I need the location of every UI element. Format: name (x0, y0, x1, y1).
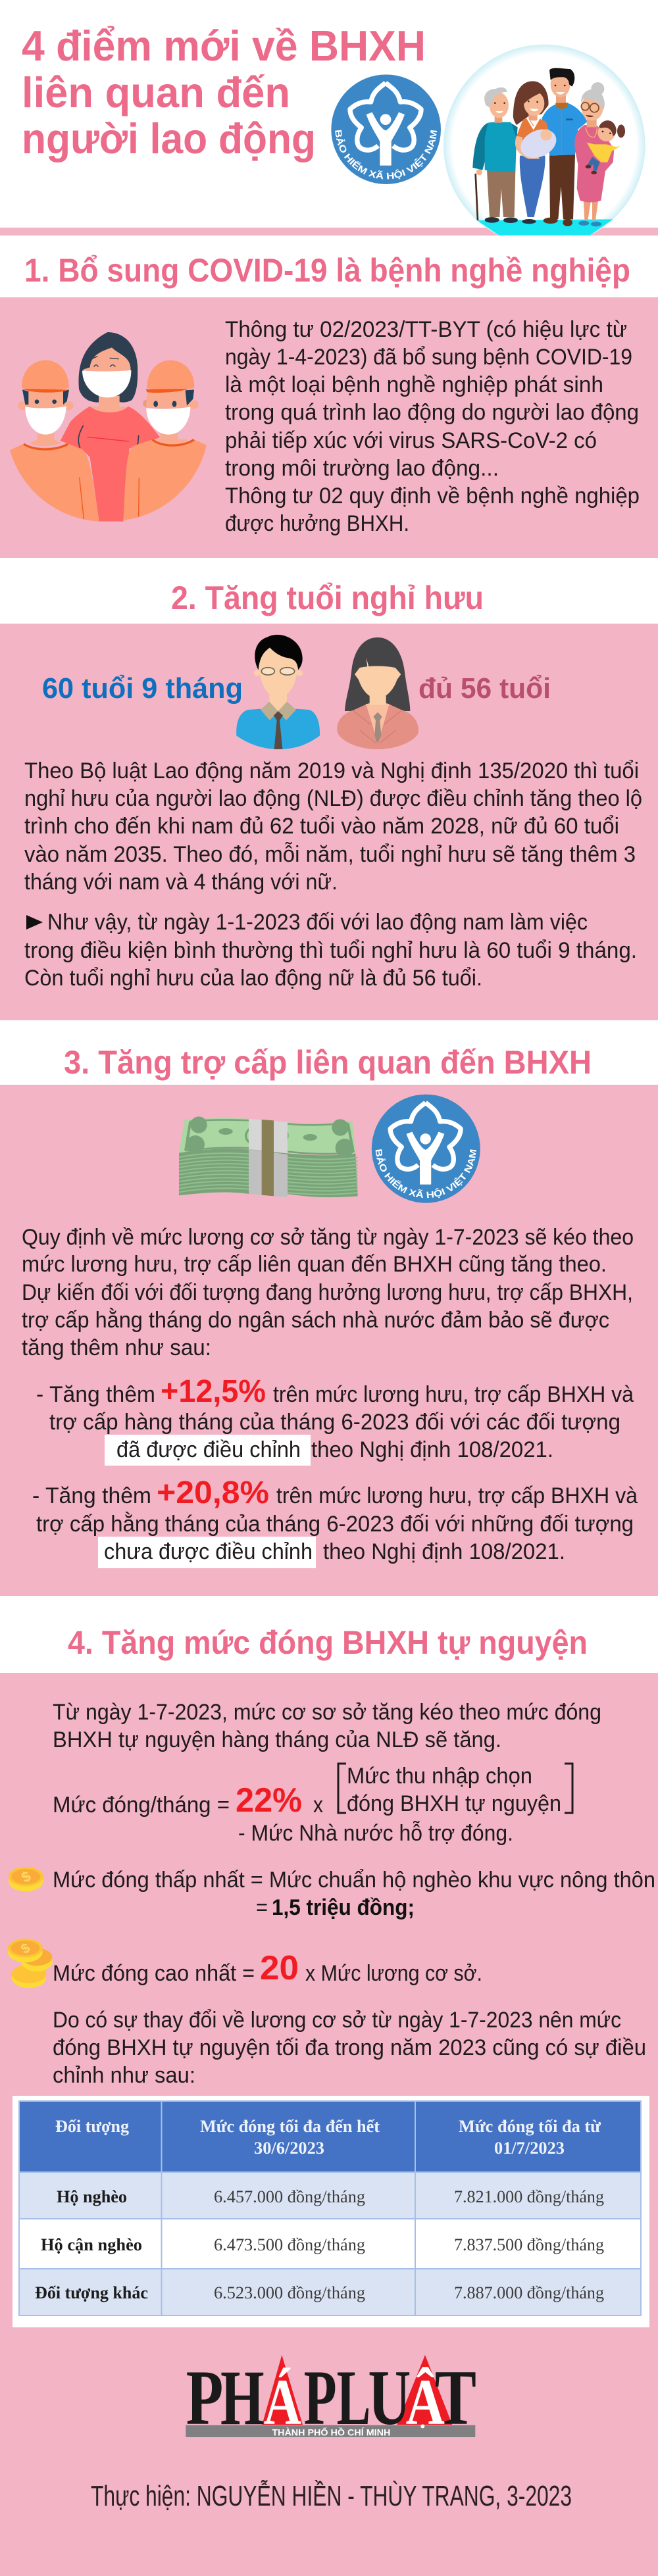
logo: Pháp Luật: L (337, 2354, 370, 2441)
text block: section 1: Thông tư 02/2023/TT-BYT (có hiệu lực từ (225, 317, 627, 342)
callout: increase of 12.5%: trợ cấp hàng tháng của tháng 6-2023 đối với các đối tượng (49, 1410, 620, 1435)
grandfather (472, 87, 518, 223)
callout: increase of 20.8%: trợ cấp hằng tháng của tháng 6-2023 đối với những đối tượng (36, 1512, 634, 1537)
icon: BHXH logo (331, 74, 441, 184)
icon: pile of coins (8, 1939, 53, 1988)
text block: section 1: là một loại bệnh nghề nghiệp phát sinh (225, 372, 603, 397)
formula: monthly contribution: Mức đóng/tháng = (53, 1793, 230, 1818)
heading: section 4: 4. Tăng mức đóng BHXH tự nguyện (68, 1624, 588, 1661)
logo: Pháp Luật: H (220, 2354, 265, 2441)
icon: woman avatar (337, 637, 418, 749)
text block: section 1 (225, 317, 640, 536)
callout: increase of 20.8%: - Tăng thêm (32, 1483, 151, 1508)
table row: Hộ cận nghèo: Hộ cận nghèo (41, 2235, 142, 2254)
text block: section 3 intro: trợ cấp hằng tháng do ngân sách nhà nước đảm bảo sẽ được (22, 1308, 609, 1333)
text block: section 2 explanation (24, 758, 642, 895)
formula: monthly contribution: đóng BHXH tự nguyện (347, 1791, 561, 1816)
logo: Pháp Luật: P (304, 2354, 337, 2441)
grandmother with child (574, 82, 625, 226)
heading: section 3: 3. Tăng trợ cấp liên quan đến BHXH (64, 1044, 592, 1081)
table row: Hộ cận nghèo: 7.837.500 đồng/tháng (454, 2235, 604, 2254)
icon: BHXH logo: BẢO HIỂM XÃ HỘI VIỆT NAM (335, 130, 437, 179)
callout: increase of 20.8% (32, 1475, 638, 1568)
logo: Pháp Luật: Á (264, 2365, 301, 2439)
table row: Hộ nghèo: 7.821.000 đồng/tháng (454, 2187, 604, 2206)
table row: Đối tượng khác: 7.887.000 đồng/tháng (454, 2283, 604, 2302)
formula: monthly contribution: Mức thu nhập chọn (347, 1764, 532, 1789)
table row: Hộ cận nghèo (41, 2235, 604, 2254)
text block: section 2 explanation: trình cho đến khi nam đủ 62 tuổi vào năm 2028, nữ đủ 60 tuổi (24, 814, 619, 839)
text block: section 2 conclusion: trong điều kiện bình thường thì tuổi nghỉ hưu là 60 tuổi 9 tháng. (24, 938, 637, 963)
callout: increase of 12.5%: trên mức lương hưu, trợ cấp BHXH và (273, 1382, 634, 1407)
mother with baby (513, 81, 561, 224)
callout: increase of 20.8%: trên mức lương hưu, trợ cấp BHXH và (276, 1483, 638, 1508)
table row: Hộ nghèo: Hộ nghèo (57, 2187, 127, 2206)
callout: increase of 20.8%: theo Nghị định 108/2021. (323, 1539, 565, 1564)
callout: increase of 12.5%: - Tăng thêm (36, 1382, 155, 1407)
text block: table intro: Do có sự thay đổi về lương cơ sở từ ngày 1-7-2023 nên mức (53, 2008, 621, 2033)
text block: section 2 conclusion: Còn tuổi nghỉ hưu của lao động nữ là đủ 56 tuổi. (24, 966, 482, 991)
label: female retirement age: đủ 56 tuổi (418, 672, 551, 705)
text block: section 3 intro: Quy định về mức lương cơ sở tăng từ ngày 1-7-2023 sẽ kéo theo (22, 1225, 634, 1250)
table header: Đối tượng (55, 2117, 129, 2136)
title: người lao động (22, 114, 316, 162)
logo: Pháp Luật: P (186, 2354, 223, 2441)
text block: section 1: được hưởng BHXH. (225, 511, 409, 536)
formula: monthly contribution: - Mức Nhà nước hỗ trợ đóng. (238, 1821, 513, 1846)
text block: table intro (53, 2008, 646, 2088)
icon: BHXH logo: BẢO HIỂM XÃ HỘI VIỆT NAM (375, 1149, 476, 1199)
logo: Pháp Luật: T (435, 2354, 476, 2441)
text block: table intro: chỉnh như sau: (53, 2063, 195, 2088)
callout: increase of 12.5% (36, 1374, 634, 1466)
title: liên quan đến (22, 68, 290, 116)
table: maximum voluntary contribution (13, 2096, 649, 2327)
icon: family in a bubble (443, 45, 645, 246)
text block: maximum contribution: 20 (260, 1949, 299, 1987)
text block: section 4 intro (53, 1700, 601, 1752)
table header: 01/7/2023 (494, 2139, 565, 2158)
text block: minimum contribution: = (256, 1895, 268, 1920)
text block: maximum contribution: Mức đóng cao nhất = (53, 1961, 255, 1986)
table row: Đối tượng khác: Đối tượng khác (35, 2283, 148, 2302)
logo: Pháp Luật: Â (406, 2365, 445, 2439)
text block: section 1: trong quá trình lao động do người lao động (225, 400, 639, 425)
table row: Hộ nghèo: 6.457.000 đồng/tháng (214, 2187, 365, 2206)
icon: three workers wearing masks (10, 332, 207, 522)
icon: single coin (9, 1867, 43, 1891)
callout: increase of 20.8%: chưa được điều chỉnh (104, 1539, 313, 1564)
father (542, 68, 588, 226)
table row: Hộ nghèo (57, 2187, 604, 2206)
text block: section 4 intro: Từ ngày 1-7-2023, mức cơ sơ sở tăng kéo theo mức đóng (53, 1700, 601, 1725)
text block: section 1: trong môi trường lao động... (225, 456, 499, 481)
heading: section 2: 2. Tăng tuổi nghỉ hưu (171, 580, 484, 616)
arrow (26, 915, 43, 929)
woman in center (61, 332, 160, 522)
text block: section 3 intro: mức lương hưu, trợ cấp liên quan đến BHXH cũng tăng theo. (22, 1252, 607, 1277)
icon: stack of money (179, 1116, 358, 1197)
formula: monthly contribution: x (313, 1793, 323, 1818)
table row: Hộ cận nghèo: 6.473.500 đồng/tháng (214, 2235, 365, 2254)
text block: minimum contribution: 1,5 triệu đồng; (272, 1895, 415, 1920)
icon: BHXH logo (371, 1095, 480, 1203)
title: 4 điểm mới về BHXH (22, 22, 426, 70)
table header: Mức đóng tối đa đến hết (200, 2117, 380, 2136)
icon: pile of coins: $ (18, 1940, 33, 1957)
text block: maximum contribution: x Mức lương cơ sở. (305, 1961, 482, 1986)
right worker (123, 360, 207, 520)
icon: single coin: $ (18, 1868, 34, 1886)
text block: section 2 conclusion (24, 910, 637, 991)
label: male retirement age: 60 tuổi 9 tháng (42, 672, 243, 705)
text block: section 3 intro: tăng thêm như sau: (22, 1335, 211, 1360)
table header: 30/6/2023 (254, 2139, 324, 2158)
text block: section 2 explanation: Theo Bộ luật Lao động năm 2019 và Nghị định 135/2020 thì tuổi (24, 758, 639, 783)
table header (55, 2117, 601, 2158)
text block: section 2 conclusion: Như vậy, từ ngày 1-1-2023 đối với lao động nam làm việc (47, 910, 588, 935)
callout: increase of 12.5%: đã được điều chỉnh (116, 1437, 301, 1462)
callout: increase of 12.5%: theo Nghị định 108/2021. (311, 1437, 553, 1462)
title (22, 22, 426, 162)
text block: section 1: ngày 1-4-2023) đã bổ sung bệnh COVID-19 (225, 345, 632, 370)
text block: table intro: đóng BHXH tự nguyện tối đa trong năm 2023 cũng có sự điều (53, 2035, 646, 2060)
left worker (10, 360, 99, 522)
formula: monthly contribution (53, 1764, 572, 1846)
text block: maximum contribution (53, 1949, 482, 1987)
table row: Đối tượng khác: 6.523.000 đồng/tháng (214, 2283, 365, 2302)
formula: monthly contribution: 22% (236, 1781, 302, 1820)
text block: minimum contribution (53, 1868, 655, 1920)
callout: increase of 12.5%: +12,5% (161, 1374, 266, 1409)
text block: section 2 explanation: nghỉ hưu của người lao động (NLĐ) được điều chỉnh tăng theo lộ (24, 786, 642, 811)
text block: section 1: Thông tư 02 quy định về bệnh nghề nghiệp (225, 483, 640, 508)
logo: Pháp Luật: THÀNH PHỐ HỒ CHÍ MINH (272, 2426, 390, 2437)
text block: section 4 intro: BHXH tự nguyện hàng tháng của NLĐ sẽ tăng. (53, 1727, 501, 1752)
text block: section 3 intro: Dự kiến đối với đối tượng đang hưởng lương hưu, trợ cấp BHXH, (22, 1280, 633, 1305)
table row: Đối tượng khác (35, 2283, 604, 2302)
text block: section 3 intro (22, 1225, 634, 1360)
table header: Mức đóng tối đa từ (459, 2117, 601, 2136)
text block: section 2 explanation: tháng với nam và 4 tháng với nữ. (24, 870, 338, 895)
text block: section 2 explanation: vào năm 2035. Theo đó, mỗi năm, tuổi nghỉ hưu sẽ tăng thêm 3 (24, 842, 636, 867)
logo: Pháp Luật (186, 2354, 476, 2441)
callout: increase of 20.8%: +20,8% (157, 1475, 269, 1510)
text block: section 1: phải tiếp xúc với virus SARS-CoV-2 có (225, 428, 597, 453)
logo: Pháp Luật: U (368, 2354, 411, 2441)
icon: man avatar (236, 635, 320, 749)
